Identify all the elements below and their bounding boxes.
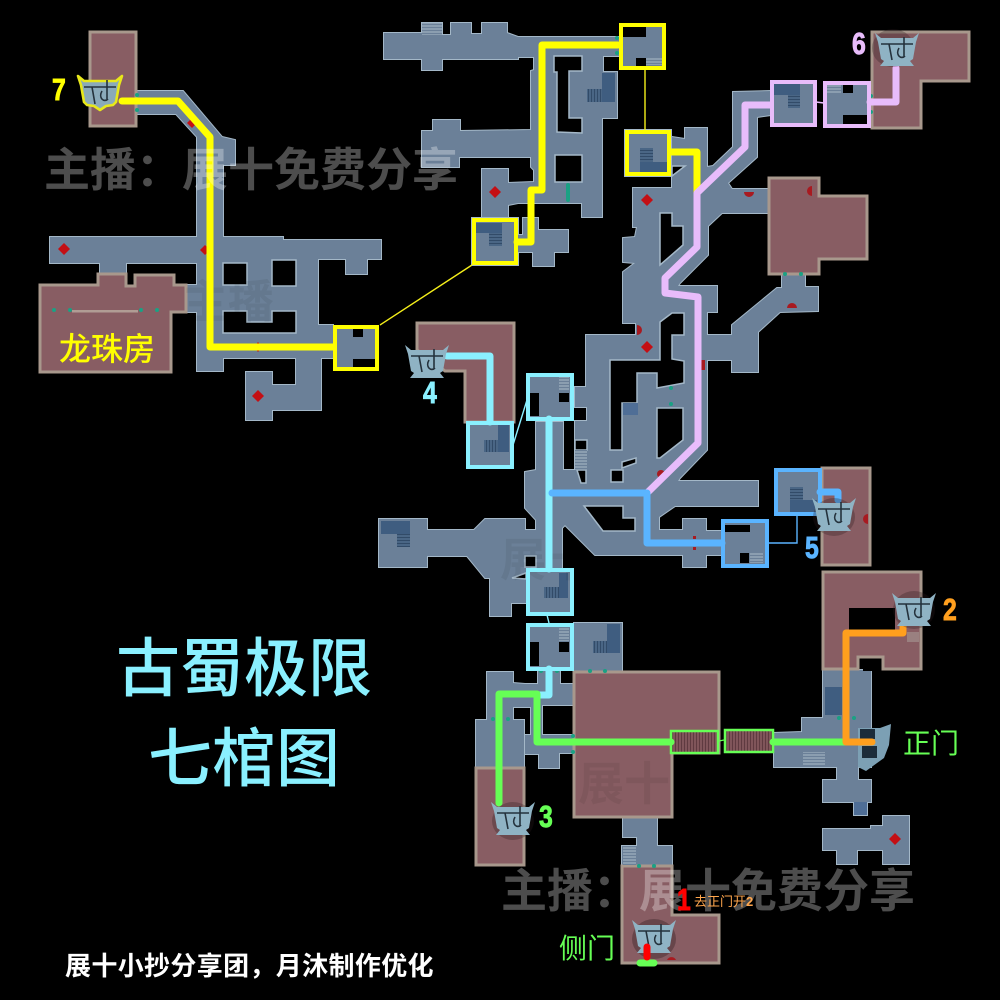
route: orange xyxy=(846,626,903,742)
faint embedded watermarks: 展十 xyxy=(578,758,670,810)
route: blue xyxy=(552,470,838,566)
number 1: 1 xyxy=(677,882,691,917)
icon: chest 1 xyxy=(632,919,676,959)
room: chest 6 xyxy=(872,32,969,128)
red diamond markers xyxy=(58,118,901,845)
label: note for chest 1: 去正门开2 xyxy=(694,894,753,909)
room: chest 3 xyxy=(476,768,524,865)
number 2: 2 xyxy=(943,592,957,627)
number 3: 3 xyxy=(539,799,553,834)
icon: chest 4 xyxy=(405,345,449,378)
room: treasury xyxy=(769,178,867,274)
red half-round markers xyxy=(637,186,868,960)
wall cutouts xyxy=(223,56,685,579)
main gate icon xyxy=(858,724,891,771)
icon: chest 7 xyxy=(78,76,122,110)
room: chest 2 xyxy=(823,572,921,669)
route: yellow xyxy=(122,25,697,369)
label: dragon pearl room: 龙珠房 xyxy=(59,331,155,367)
icon: chest 2 xyxy=(892,591,936,629)
thin connector lines xyxy=(380,69,824,741)
black notches in rooms xyxy=(353,27,895,671)
room: chest 4 xyxy=(417,323,514,422)
title line 2: 七棺图 xyxy=(148,723,340,795)
number 5: 5 xyxy=(805,530,819,565)
icon: chest 5 xyxy=(812,498,856,536)
room: chest 5 xyxy=(822,468,870,565)
label: side gate: 侧门 xyxy=(559,933,615,964)
room: chest 1 xyxy=(622,866,719,963)
icon: chest 3 xyxy=(491,802,535,840)
watermark: bottom: 主播：展十免费分享 xyxy=(501,865,915,917)
watermark: top: 主播：展十免费分享 xyxy=(44,144,458,196)
number 6: 6 xyxy=(852,26,866,61)
title line 1: 古蜀极限 xyxy=(116,633,372,705)
stair and light marks xyxy=(72,23,919,865)
room: dragon pearl room xyxy=(40,274,186,372)
room: chest 7 xyxy=(90,32,136,126)
number 4: 4 xyxy=(423,375,437,410)
floor outline layer xyxy=(50,23,909,866)
credit: 展十小抄分享团，月沐制作优化 xyxy=(65,951,434,981)
faint embedded watermarks: 展十 xyxy=(500,534,592,586)
faint embedded watermarks xyxy=(182,276,670,810)
faint embedded watermarks: 主播 xyxy=(182,276,274,328)
route: red start xyxy=(644,947,650,957)
label: main gate: 正门 xyxy=(903,728,959,759)
route: green xyxy=(499,694,848,963)
room: central hall xyxy=(574,672,719,817)
floor fill layer xyxy=(50,23,909,866)
route: cyan xyxy=(447,356,572,695)
icon: chest 6 xyxy=(872,29,919,67)
number 7: 7 xyxy=(52,72,66,107)
stair bridges xyxy=(671,730,773,753)
teal door markers xyxy=(52,36,873,868)
route: pink xyxy=(647,68,896,493)
